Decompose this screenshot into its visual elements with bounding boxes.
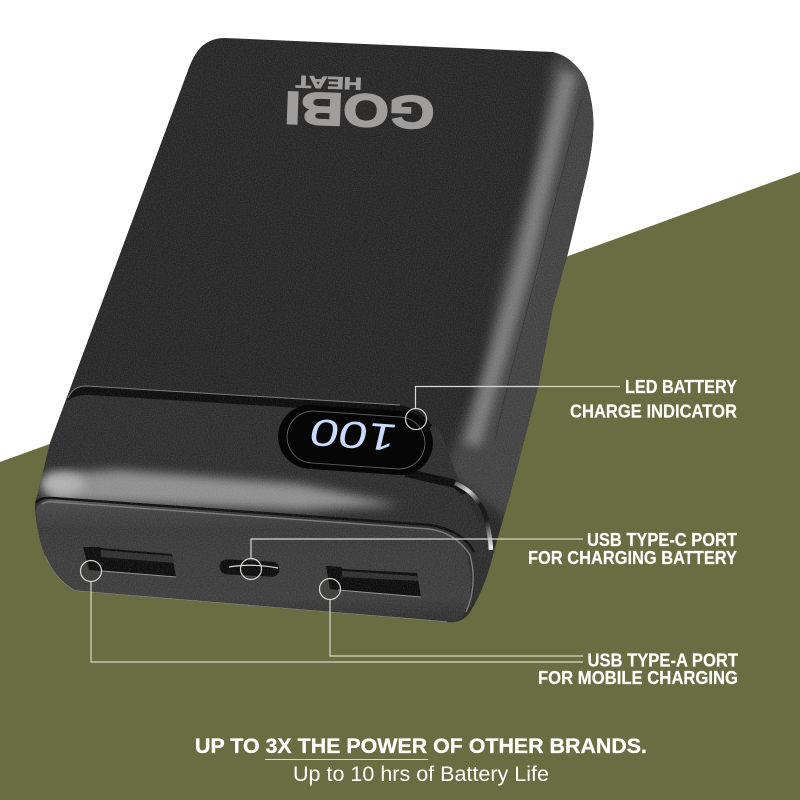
LED digits: 100: [306, 410, 401, 458]
power bank device: [20, 30, 610, 630]
top surface: [20, 30, 610, 630]
leader: left USB-A port: [80, 560, 583, 662]
USB-C port: [219, 559, 280, 577]
bottom headline: [195, 735, 647, 786]
front face bottom rim: [45, 556, 447, 622]
leader: USB-C port: [240, 539, 583, 580]
surface grain: [20, 30, 610, 630]
callout labels: [528, 377, 738, 688]
right side surface: [449, 54, 594, 518]
USB-A port left: [83, 547, 176, 577]
leader: right USB-A port: [320, 578, 583, 656]
headline underline: [265, 759, 428, 760]
groove upper highlight: [68, 386, 400, 405]
label: LED battery charge indicator: CHARGE INDICATOR: [570, 402, 737, 422]
front face top rim highlight: [42, 502, 473, 612]
logo word GOBI: GOBI: [284, 82, 435, 139]
right side seam: [495, 100, 581, 440]
display inner outline: [285, 409, 427, 471]
right rounded edge of front: [477, 554, 494, 600]
front face with ports: [36, 498, 494, 622]
label: USB Type-C port: FOR CHARGING BATTERY: [528, 548, 737, 568]
label: LED battery charge indicator: [570, 377, 737, 422]
logo word HEAT: HEAT: [295, 72, 362, 93]
headline text: UP TO 3X THE POWER OF OTHER BRANDS.: [195, 735, 647, 758]
front band corner glow: [40, 473, 84, 495]
USB-A port right: [326, 566, 421, 597]
label: USB Type-A port: [538, 650, 738, 688]
LED display pill: [276, 403, 435, 477]
label: USB Type-A port: FOR MOBILE CHARGING: [538, 668, 738, 688]
GOBI HEAT logo: [284, 72, 435, 139]
groove under display: [405, 470, 467, 495]
device body: [20, 30, 610, 630]
front band base: [35, 392, 458, 520]
label: USB Type-A port: USB TYPE-A PORT: [588, 650, 738, 670]
label: USB Type-C port: USB TYPE-C PORT: [587, 530, 737, 550]
label: LED battery charge indicator: LED BATTERY: [625, 377, 737, 397]
grooved top line: [67, 386, 432, 429]
olive angled background panel: [0, 172, 800, 800]
subheading: Up to 10 hrs of Battery Life: [293, 763, 549, 786]
glossy corner highlight: [455, 483, 491, 550]
right side highlight ridge: [472, 72, 569, 445]
leader: LED indicator: [406, 386, 620, 430]
front face panel: [36, 502, 471, 622]
front band light glow: [48, 470, 400, 510]
label: USB Type-C port: [528, 530, 737, 568]
display housing: [276, 403, 435, 477]
leader lines and target circles: [80, 386, 620, 662]
front face top groove: [36, 498, 474, 552]
